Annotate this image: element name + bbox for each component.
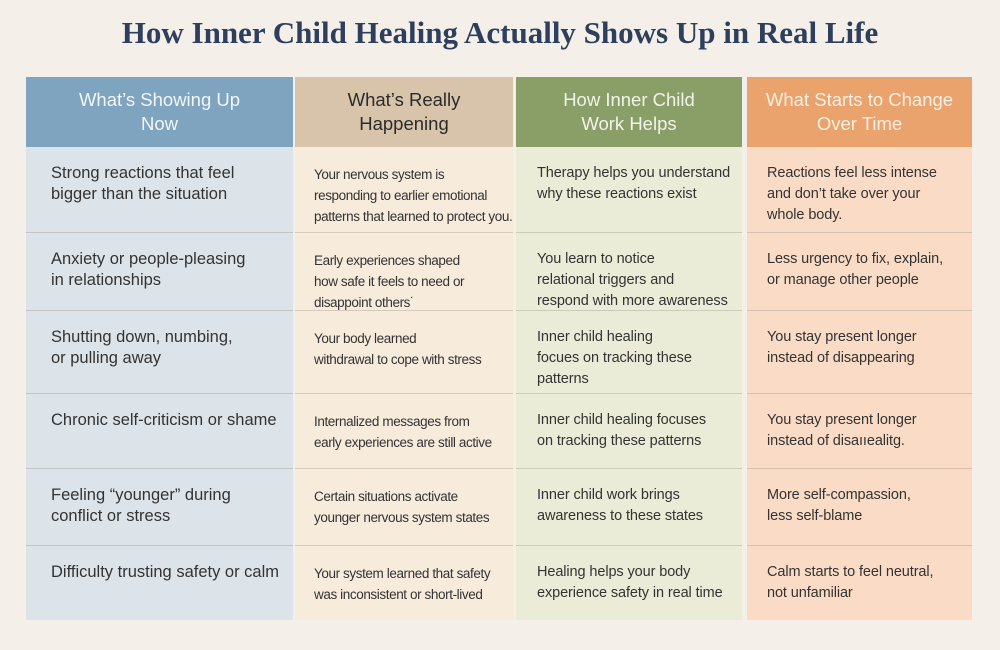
column: what starts to change: Less urgency to fix, explain,: [767, 251, 943, 267]
column: what starts to change: More self-compassion,: [767, 487, 911, 503]
column: how inner child work helps: experience safety in real time: [537, 585, 723, 601]
column: how inner child work helps: why these reactions exist: [537, 186, 696, 202]
column: what's showing up now: Chronic self-criticism or shame: [51, 411, 277, 429]
column: how inner child work helps: Inner child healing focuses: [537, 412, 706, 428]
column: what's showing up now: Shutting down, numbing,: [51, 328, 233, 346]
column: what's really happening: younger nervous system states: [314, 510, 489, 525]
column: how inner child work helps: You learn to notice: [537, 251, 655, 267]
column: what starts to change: Over Time: [817, 113, 902, 134]
column: what's showing up now: or pulling away: [51, 349, 161, 367]
column: how inner child work helps: relational triggers and: [537, 272, 674, 288]
column: what's showing up now: Now: [141, 113, 178, 134]
column: what's really happening: Your nervous system is: [314, 167, 444, 182]
title: How Inner Child Healing Actually Shows Up in Real Life: [122, 15, 878, 50]
column: what's really happening: was inconsistent or short-lived: [314, 587, 482, 602]
column: what's really happening: patterns that learned to protect you.: [314, 209, 512, 224]
column: what's really happening: Early experiences shaped: [314, 253, 460, 268]
column: how inner child work helps: Work Helps: [581, 113, 677, 134]
column: how inner child work helps: Inner child healing: [537, 329, 653, 345]
column: what's showing up now: in relationships: [51, 271, 161, 289]
column: what's really happening: how safe it feels to need or: [314, 274, 464, 289]
column: what starts to change: Reactions feel less intense: [767, 165, 937, 181]
column: how inner child work helps: Therapy helps you understand: [537, 165, 730, 181]
column: what starts to change: or manage other people: [767, 272, 919, 288]
column: what's really happening: Internalized messages from: [314, 414, 469, 429]
column: what starts to change: instead of disaııealitg.: [767, 433, 905, 449]
column: what's showing up now: Strong reactions that feel: [51, 164, 234, 182]
column: what starts to change: Calm starts to feel neutral,: [767, 564, 933, 580]
column: what's really happening: Happening: [359, 113, 449, 134]
column: how inner child work helps: Healing helps your body: [537, 564, 690, 580]
column: what's showing up now: [26, 77, 293, 620]
column: what's showing up now: conflict or stress: [51, 507, 170, 525]
column: what starts to change: less self-blame: [767, 508, 862, 524]
column: what starts to change: whole body.: [767, 207, 842, 223]
column: what's really happening: disappoint others˙: [314, 295, 414, 310]
column: what starts to change: You stay present longer: [767, 412, 917, 428]
column: what's really happening: What’s Really: [348, 89, 460, 110]
column: how inner child work helps: Inner child work brings: [537, 487, 680, 503]
column: what starts to change: and don’t take over your: [767, 186, 920, 202]
column: what's really happening: responding to earlier emotional: [314, 188, 487, 203]
column: how inner child work helps: on tracking these patterns: [537, 433, 701, 449]
column: what's really happening: [295, 77, 513, 620]
column: how inner child work helps: focues on tracking these: [537, 350, 692, 366]
column: what starts to change: You stay present longer: [767, 329, 917, 345]
column: what's really happening: Your system learned that safety: [314, 566, 490, 581]
column: what's really happening: Your body learned: [314, 331, 416, 346]
column: what's showing up now: Feeling “younger” during: [51, 486, 231, 504]
column: what's showing up now: What’s Showing Up: [79, 89, 240, 110]
column: what's really happening: Certain situations activate: [314, 489, 458, 504]
column: what starts to change: not unfamiliar: [767, 585, 853, 601]
column: how inner child work helps: awareness to these states: [537, 508, 703, 524]
column: what's showing up now: Anxiety or people-pleasing: [51, 250, 245, 268]
column: how inner child work helps: patterns: [537, 371, 589, 387]
column: what's really happening: early experiences are still active: [314, 435, 492, 450]
column: what starts to change: instead of disappearing: [767, 350, 915, 366]
column: what starts to change: [747, 77, 972, 620]
column: how inner child work helps: How Inner Child: [563, 89, 695, 110]
column: how inner child work helps: respond with more awareness: [537, 293, 728, 309]
column: what's showing up now: Difficulty trusting safety or calm: [51, 563, 279, 581]
column: what's really happening: withdrawal to cope with stress: [314, 352, 481, 367]
column: what starts to change: What Starts to Change: [766, 89, 953, 110]
column: how inner child work helps: [516, 77, 742, 620]
column: what's showing up now: bigger than the situation: [51, 185, 227, 203]
